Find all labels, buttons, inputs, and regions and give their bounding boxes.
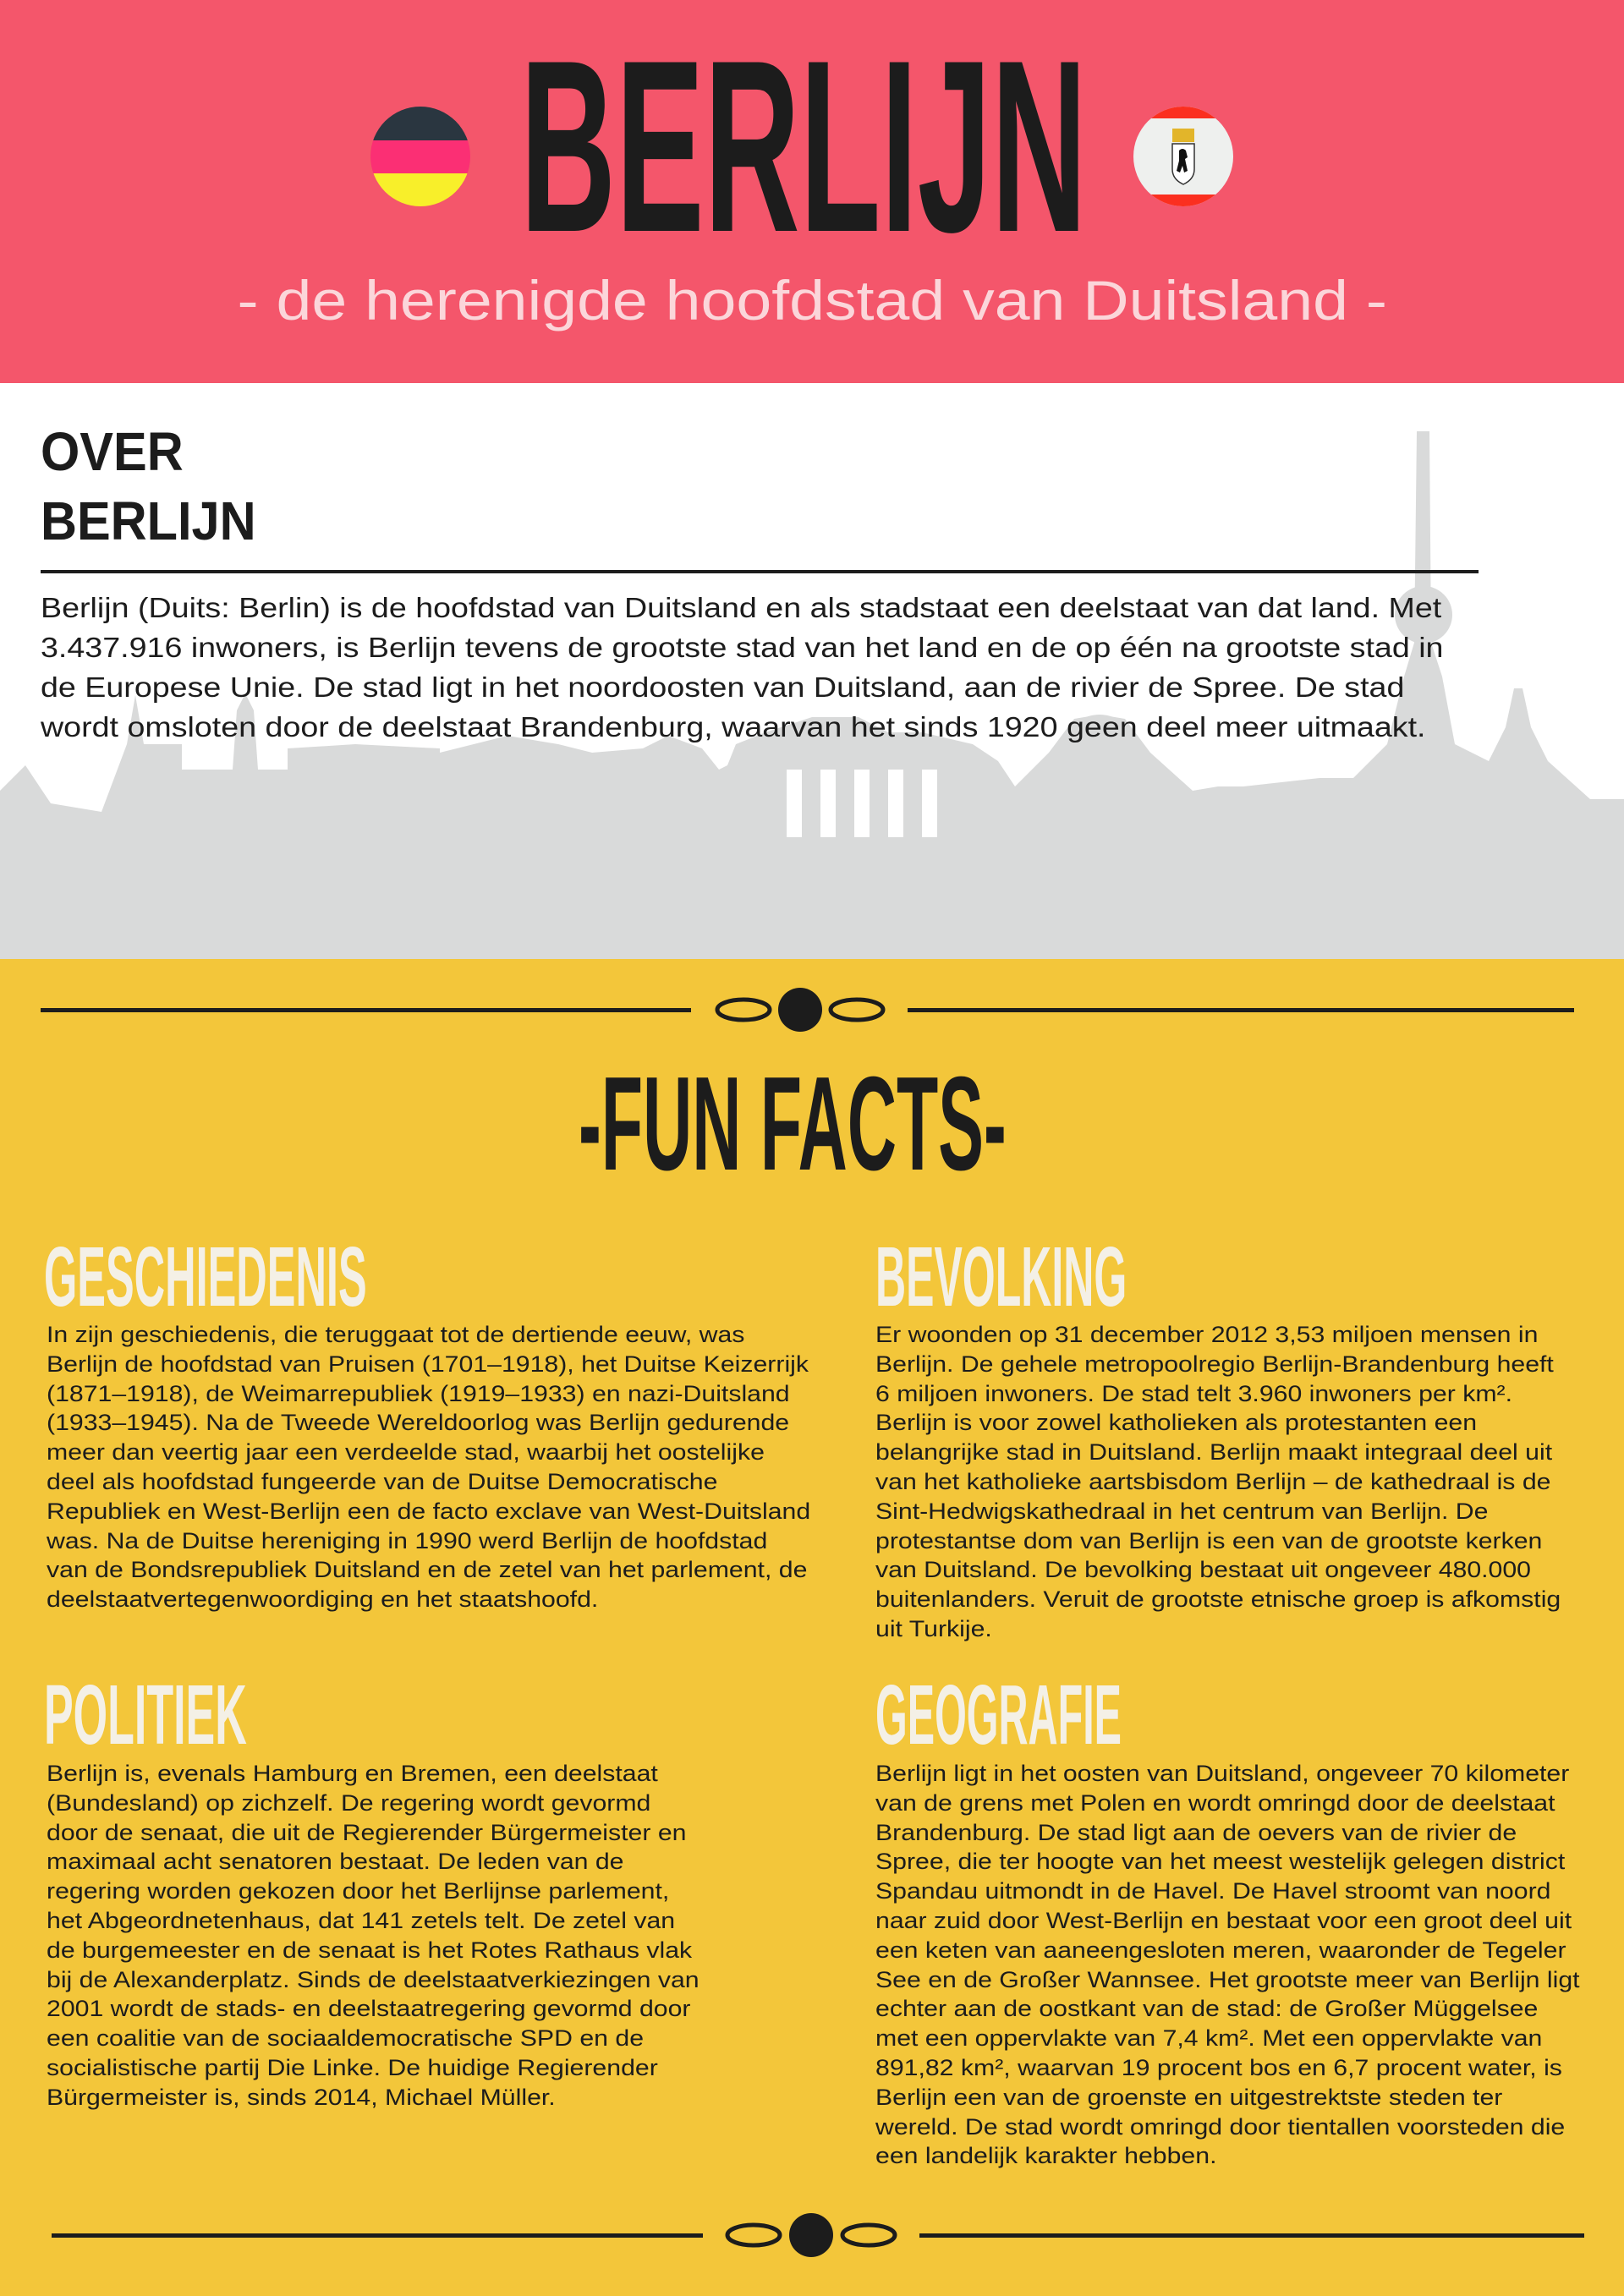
text: bevolking: protestantse dom van Berlijn is een van de grootste kerken — [875, 1528, 1542, 1553]
heading: bevolking: BEVOLKING — [875, 1230, 1127, 1324]
text: geografie: See en de Großer Wannsee. Het grootste meer van Berlijn ligt — [875, 1967, 1580, 1992]
text: politiek: maximaal acht senatoren bestaat. De leden van de — [47, 1849, 624, 1874]
intro paragraph: 3.437.916 inwoners, is Berlijn tevens de grootste stad van het land en de op één na grootste stad in — [41, 632, 1443, 663]
text: bevolking: Er woonden op 31 december 2012 3,53 miljoen mensen in — [875, 1322, 1538, 1347]
text: geografie: Brandenburg. De stad ligt aan de oevers van de rivier de — [875, 1820, 1517, 1845]
text: politiek: door de senaat, die uit de Regierender Bürgermeister en — [47, 1820, 686, 1845]
heading: geografie: GEOGRAFIE — [875, 1668, 1122, 1762]
text: bevolking: Berlijn is voor zowel katholieken als protestanten een — [875, 1410, 1477, 1435]
title: BERLIJN — [520, 9, 1087, 283]
intro paragraph: Berlijn (Duits: Berlin) is de hoofdstad van Duitsland en als stadstaat een deelstaat van dat land. Met — [41, 592, 1441, 623]
text: geschiedenis: In zijn geschiedenis, die teruggaat tot de dertiende eeuw, was — [47, 1322, 744, 1347]
text: bevolking: Berlijn. De gehele metropoolregio Berlijn-Brandenburg heeft — [875, 1351, 1554, 1377]
header banner — [0, 0, 1624, 383]
heading: over berlijn: OVER — [41, 421, 184, 482]
text: geschiedenis: was. Na de Duitse hereniging in 1990 werd Berlijn de hoofdstad — [47, 1528, 767, 1553]
skyline silhouette — [0, 431, 1624, 959]
text: bevolking: van Duitsland. De bevolking bestaat uit ongeveer 480.000 — [875, 1557, 1531, 1582]
text: geschiedenis: van de Bondsrepubliek Duitsland en de zetel van het parlement, de — [47, 1557, 807, 1582]
intro paragraph: wordt omsloten door de deelstaat Brandenburg, waarvan het sinds 1920 geen deel meer uitmaakt. — [41, 711, 1425, 743]
text: bevolking — [875, 1322, 1561, 1641]
panel: geschiedenis — [44, 1230, 810, 1612]
panel: politiek — [44, 1668, 700, 2110]
text: politiek: 2001 wordt de stads- en deelstaatregering gevormd door — [47, 1996, 691, 2021]
text: bevolking: 6 miljoen inwoners. De stad telt 3.960 inwoners per km². — [875, 1381, 1512, 1406]
panel: bevolking — [875, 1230, 1561, 1641]
text: geografie — [875, 1761, 1580, 2168]
text: politiek: Berlijn is, evenals Hamburg en Bremen, een deelstaat — [47, 1761, 658, 1786]
divider line — [41, 570, 1479, 573]
text: geografie: een landelijk karakter hebben. — [875, 2143, 1216, 2168]
heading: politiek: POLITIEK — [44, 1668, 247, 1762]
text: geografie: echter aan de oostkant van de stad: de Großer Müggelsee — [875, 1996, 1538, 2021]
text: geschiedenis: Berlijn de hoofdstad van Pruisen (1701–1918), het Duitse Keizerrijk — [47, 1351, 809, 1377]
text: geografie: van de grens met Polen en wordt omringd door de deelstaat — [875, 1790, 1555, 1816]
panel: over berlijn — [0, 383, 1624, 959]
text: bevolking: belangrijke stad in Duitsland. Berlijn maakt integraal deel uit — [875, 1439, 1552, 1465]
text: geografie: naar zuid door West-Berlijn en bestaat voor een groot deel uit — [875, 1908, 1572, 1933]
intro paragraph: de Europese Unie. De stad ligt in het noordoosten van Duitsland, aan de rivier de Spree. De stad — [41, 671, 1404, 703]
text: geschiedenis: deelstaatvertegenwoordiging en het staatshoofd. — [47, 1586, 598, 1612]
heading: over berlijn: BERLIJN — [41, 490, 256, 551]
text: politiek — [47, 1761, 700, 2110]
text: geschiedenis: (1871–1918), de Weimarrepubliek (1919–1933) en nazi-Duitsland — [47, 1381, 790, 1406]
text: geografie: Berlijn een van de groenste en uitgestrektste steden ter — [875, 2085, 1502, 2110]
text: bevolking: van het katholieke aartsbisdom Berlijn – de kathedraal is de — [875, 1469, 1550, 1494]
text: politiek: een coalitie van de sociaaldemocratische SPD en de — [47, 2025, 644, 2051]
icon: german flag — [370, 107, 470, 206]
icon: berlin flag — [1133, 107, 1233, 206]
text: geschiedenis: (1933–1945). Na de Tweede Wereldoorlog was Berlijn gedurende — [47, 1410, 789, 1435]
text: politiek: Bürgermeister is, sinds 2014, Michael Müller. — [47, 2085, 556, 2110]
text: bevolking: Sint-Hedwigskathedraal in het centrum van Berlijn. De — [875, 1499, 1488, 1524]
text: geografie: Berlijn ligt in het oosten van Duitsland, ongeveer 70 kilometer — [875, 1761, 1569, 1786]
panel: geografie — [875, 1668, 1580, 2168]
text: politiek: bij de Alexanderplatz. Sinds de deelstaatverkiezingen van — [47, 1967, 700, 1992]
text: geografie: met een oppervlakte van 7,4 km². Met een oppervlakte van — [875, 2025, 1542, 2051]
text: politiek: de burgemeester en de senaat is het Rotes Rathaus vlak — [47, 1937, 692, 1963]
text: politiek: socialistische partij Die Linke. De huidige Regierender — [47, 2055, 658, 2080]
text: geografie: wereld. De stad wordt omringd door tientallen voorsteden die — [875, 2114, 1565, 2140]
text: geografie: Spree, die ter hoogte van het meest westelijk gelegen district — [875, 1849, 1565, 1874]
text: politiek: (Bundesland) op zichzelf. De regering wordt gevormd — [47, 1790, 650, 1816]
text: geschiedenis — [47, 1322, 810, 1612]
text: politiek: regering worden gekozen door het Berlijnse parlement, — [47, 1878, 669, 1904]
text: politiek: het Abgeordnetenhaus, dat 141 zetels telt. De zetel van — [47, 1908, 675, 1933]
divider ornament top — [41, 988, 1574, 1032]
text: geografie: 891,82 km², waarvan 19 procent bos en 6,7 procent water, is — [875, 2055, 1562, 2080]
divider ornament bottom — [52, 2213, 1584, 2257]
text: geschiedenis: Republiek en West-Berlijn een de facto exclave van West-Duitsland — [47, 1499, 810, 1524]
text: geografie: Spandau uitmondt in de Havel. De Havel stroomt van noord — [875, 1878, 1550, 1904]
text: geografie: een keten van aaneengesloten meren, waaronder de Tegeler — [875, 1937, 1566, 1963]
intro paragraph — [41, 592, 1443, 743]
heading: fun facts: -FUN FACTS- — [579, 1049, 1007, 1198]
text: bevolking: buitenlanders. Veruit de grootste etnische groep is afkomstig — [875, 1586, 1561, 1612]
text: geschiedenis: meer dan veertig jaar een verdeelde stad, waarbij het oostelijke — [47, 1439, 765, 1465]
subtitle: - de herenigde hoofdstad van Duitsland - — [237, 269, 1387, 332]
text: geschiedenis: deel als hoofdstad fungeerde van de Duitse Democratische — [47, 1469, 717, 1494]
heading: geschiedenis: GESCHIEDENIS — [44, 1230, 367, 1324]
heading: over berlijn — [41, 421, 256, 551]
text: bevolking: uit Turkije. — [875, 1616, 992, 1641]
